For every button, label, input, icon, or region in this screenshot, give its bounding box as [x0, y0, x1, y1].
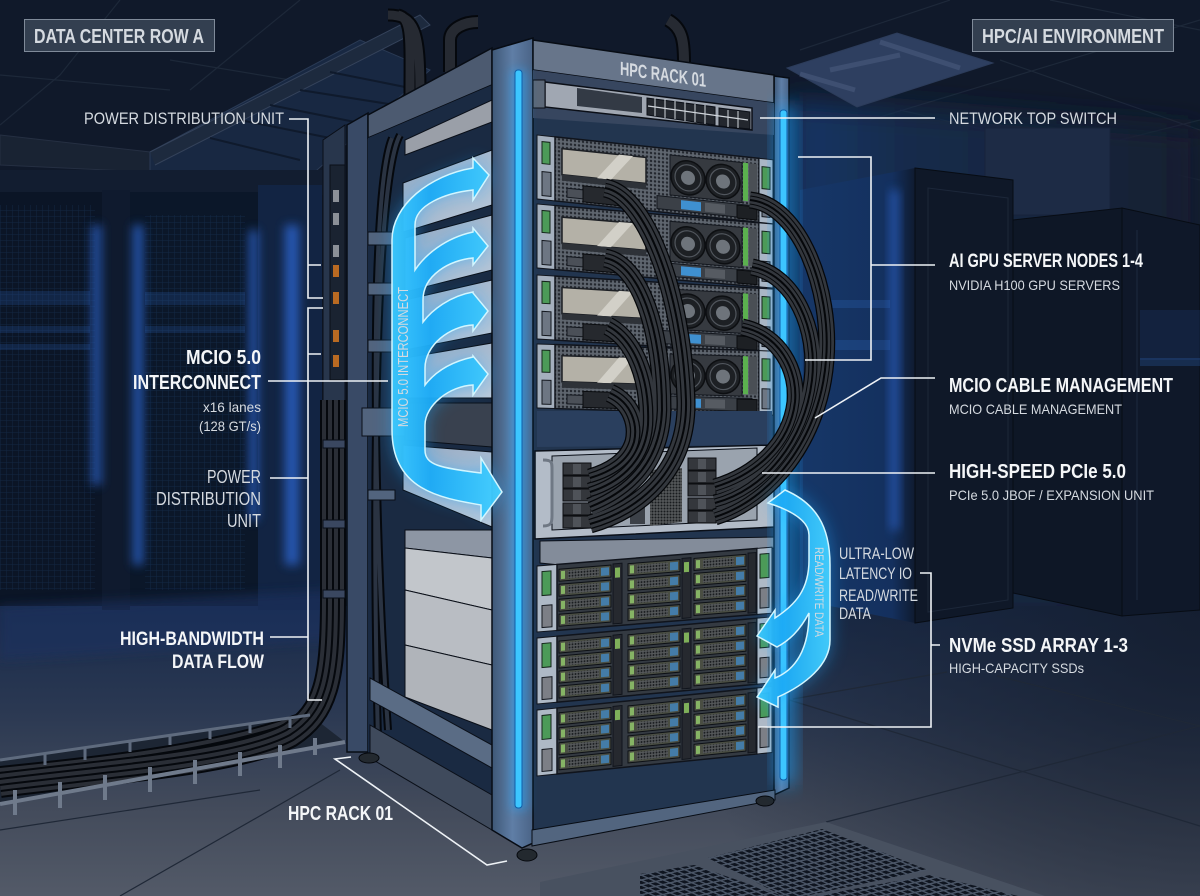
server node 4: [537, 344, 773, 415]
cable tray bottom-left: [0, 400, 345, 815]
label: ultra-low latency IO: [839, 544, 918, 623]
SSD array 2: [537, 617, 772, 704]
label: MCIO 5.0 interconnect: INTERCONNECT: [133, 372, 261, 394]
ceiling light panel: [787, 33, 993, 107]
rack interior: [532, 72, 775, 830]
floor vent grates: [540, 822, 1045, 896]
MCIO cables right bundles: [715, 200, 827, 517]
arrow: MCIO 5.0 interconnect flow: [392, 158, 502, 520]
leader lines: [268, 118, 940, 865]
ceiling grid: [0, 0, 1200, 180]
rear vertical cables: [375, 135, 400, 740]
server node 3: [537, 275, 773, 353]
label: high-speed PCIe 5.0: PCIe 5.0 JBOF / EXPANSION UNIT: [949, 487, 1154, 503]
left ceiling tray: [0, 135, 150, 172]
background server racks left: [0, 185, 340, 660]
label: NVMe SSD array: HIGH-CAPACITY SSDs: [949, 660, 1084, 676]
rack rear and side frame: [347, 48, 492, 830]
label: AI GPU server nodes: [949, 251, 1143, 293]
expansion unit: [535, 445, 775, 539]
label: MCIO 5.0 interconnect: MCIO 5.0: [186, 347, 261, 369]
label: ultra-low latency IO: READ/WRITE: [839, 586, 918, 605]
label: power distribution unit middle: DISTRIBUTION: [156, 489, 261, 509]
shelf above storage: [540, 537, 775, 565]
PDU strip: [323, 125, 345, 405]
shelf between nodes and expansion: [537, 411, 772, 447]
label: HPC rack 01: HPC RACK 01: [288, 803, 393, 825]
blue light strips: [511, 70, 795, 810]
label: high-bandwidth data flow: HIGH-BANDWIDTH: [120, 629, 264, 650]
label: MCIO 5.0 interconnect: (128 GT/s): [199, 418, 261, 434]
label: AI GPU server nodes: AI GPU SERVER NODES 1-4: [949, 251, 1143, 272]
badge: HPC/AI environment: HPC/AI ENVIRONMENT: [982, 26, 1164, 48]
label: ultra-low latency IO: DATA: [839, 604, 871, 623]
SSD array 3: [537, 686, 772, 776]
side panels of servers and storage: [403, 100, 492, 730]
label: ultra-low latency IO: LATENCY IO: [839, 564, 912, 583]
rack front frame: [492, 38, 789, 861]
label: power distribution unit top: POWER DISTRIBUTION UNIT: [84, 109, 284, 128]
label: network top switch: NETWORK TOP SWITCH: [949, 109, 1117, 128]
rack title: HPC RACK 01: [620, 59, 706, 92]
label: AI GPU server nodes: NVIDIA H100 GPU SERVERS: [949, 277, 1120, 293]
label: high-speed PCIe 5.0: [949, 461, 1154, 503]
glowing strips: [92, 225, 299, 565]
label: high-speed PCIe 5.0: HIGH-SPEED PCIe 5.0: [949, 461, 1126, 483]
arrow label: READ/WRITE DATA: [812, 547, 826, 637]
label: MCIO cable management: MCIO CABLE MANAGEMENT: [949, 401, 1122, 417]
label: MCIO 5.0 interconnect: [133, 347, 261, 434]
badge: data center row A: DATA CENTER ROW A: [34, 26, 204, 48]
label: NVMe SSD array: [949, 635, 1128, 676]
label: power distribution unit middle: POWER: [207, 467, 261, 487]
label: MCIO 5.0 interconnect: x16 lanes: [203, 399, 261, 415]
server node 1: [537, 135, 773, 224]
floor: [0, 606, 1200, 896]
arrow label: MCIO 5.0 INTERCONNECT: [395, 287, 412, 427]
MCIO cables left bundles: [590, 188, 686, 524]
label: ultra-low latency IO: ULTRA-LOW: [839, 544, 914, 563]
badge: data center row A: [24, 20, 214, 52]
label: high-bandwidth data flow: DATA FLOW: [172, 652, 264, 673]
background server racks right: [800, 168, 1200, 623]
label: MCIO cable management: [949, 375, 1173, 417]
label: power distribution unit middle: [156, 467, 261, 531]
label: power distribution unit middle: UNIT: [227, 511, 261, 531]
label: high-bandwidth data flow: [120, 629, 264, 673]
badge: HPC/AI environment: [972, 20, 1174, 52]
SSD array 1: [537, 547, 772, 632]
network top switch: [533, 80, 752, 130]
right wall glow: [790, 100, 1200, 620]
label: NVMe SSD array: NVMe SSD ARRAY 1-3: [949, 635, 1128, 657]
overhead cables: [388, 15, 684, 95]
server node 2: [537, 204, 773, 288]
arrow: read/write data flow: [757, 490, 830, 707]
